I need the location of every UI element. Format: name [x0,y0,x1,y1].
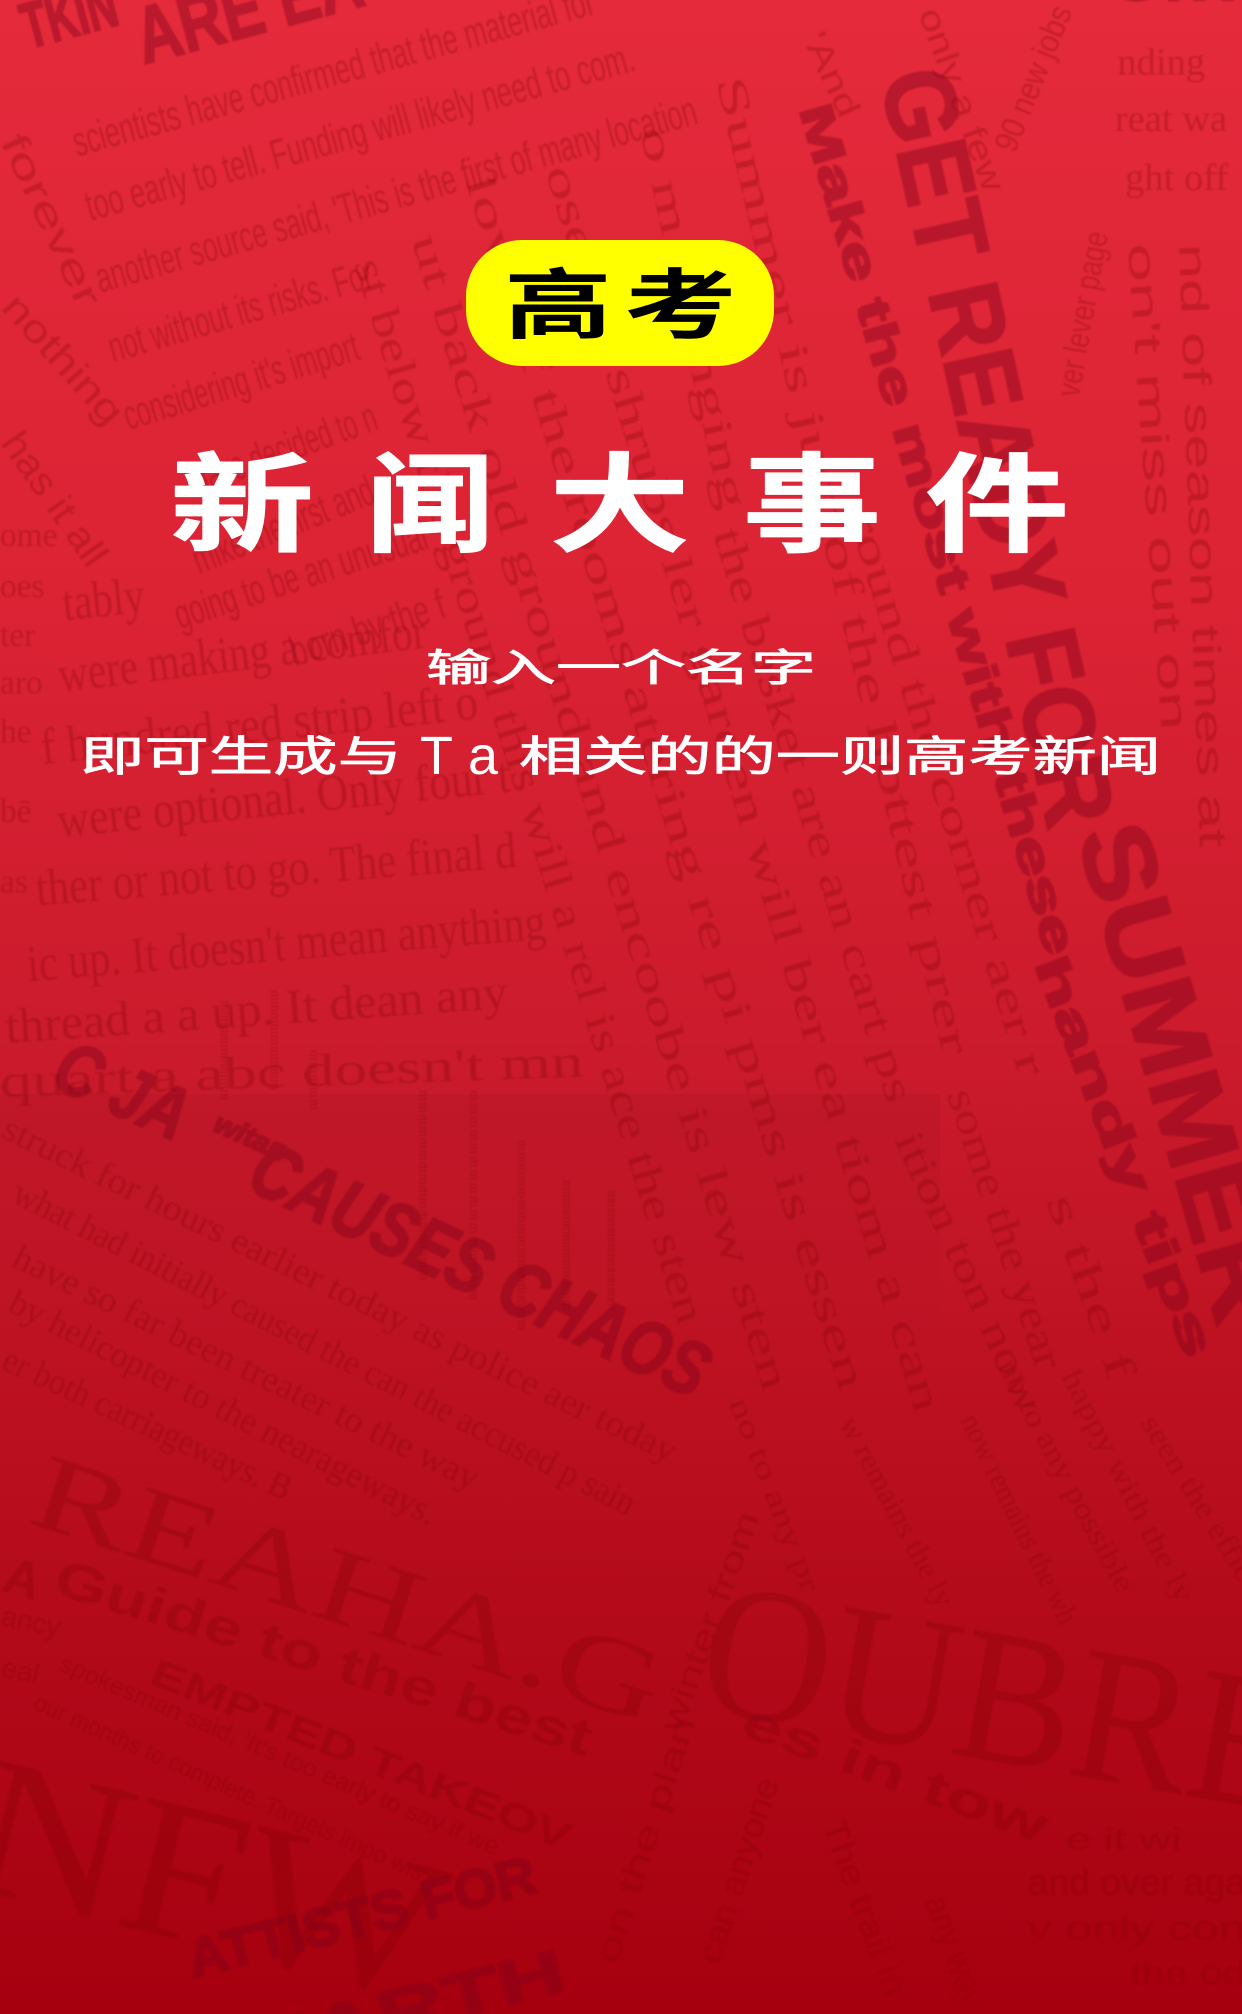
background: centre fan columns of serif text: s the f [1037,1188,1144,1385]
background: centre fan columns of serif text [217,72,1242,1630]
body text: lower-left lines: by helicopter to the nearageways. [3,1282,444,1533]
body text: lower-right lines: The trail in [814,1814,913,2002]
body text: lower-right lines: on the plan [589,1712,704,1968]
body text: lower-right lines: es in tow [735,1694,1056,1855]
background: centre fan columns of serif text: round the corner aer r [838,505,1054,1081]
background: centre fan columns of serif text: ut back old ground and encoobe is lew sten [401,228,798,1396]
body text: top-left block: not without its risks. For [103,251,377,371]
body text: upper-right columns: on't miss out on [1119,242,1196,732]
body text: top-left block: considering it's import [117,323,365,439]
body text: upper-right columns: only a few [911,3,1012,198]
body text: upper-right columns: nd of season times at [1170,243,1234,848]
body text: left serif lines: were making a comfor [55,603,429,704]
body text: left serif lines: oes [0,568,44,605]
badge text: 高考: 高 [504,264,612,349]
headline fragments: top: Make the most with these [789,97,1087,960]
background: centre fan columns of serif text: Summer is just of the hottest prer [706,72,978,1059]
title: 新闻大事件: 大 [549,445,690,566]
subtitle line 2: 相关的的一则高考新闻 [519,733,1161,780]
subtitle line 1: 输入一个名字 [426,648,816,690]
body text: lower-left sans lines: our months to complete. Targets impo wis [30,1689,428,1886]
body text: top-left block: born by the f [284,581,451,675]
body text: lower-right lines: can anyone [692,1773,786,1968]
body text: lower-left sans lines: ancy [0,1599,65,1643]
body text: left serif lines: were optional. Only four t [55,747,513,849]
body text: left serif lines: tably [60,567,147,632]
subtitle line 2: Ta [420,726,499,786]
body text: left serif lines: aro [0,665,43,702]
body text: upper-right columns: 'And [795,26,867,123]
body text: lower-right lines [589,1507,1242,2013]
tiny vertical text columns: mmmmmmmmm [217,1000,232,1100]
body text: lower-left sans lines: eal [0,1651,42,1690]
body text: left serif lines: ter [0,617,35,654]
background: centre fan columns of serif text: st below the ground this will a rel is ace the sten [344,252,714,1329]
tiny vertical text columns: mmmmmmmmmmmm [604,1190,619,1310]
tiny vertical text columns: mmmmmmmmmmmmmmmm [514,1140,529,1330]
background: centre fan columns of serif text: some the year [937,1083,1071,1375]
body text: lower-left lines: what had initially caused the can the accused p sain [7,1172,643,1523]
headline fragments: lower: C JA [42,1024,203,1156]
headline fragments: top: GET READY FOR [858,57,1136,836]
body text: left serif lines: thread a a up. It dean any [3,965,510,1054]
body text: top-right lines: nding [1117,41,1205,83]
body text: lower-left sans lines: Guide to the best [48,1548,599,1767]
background: centre fan columns of serif text: the basket are an cart ps [703,522,922,1108]
subtitle line 2: 即可生成与 [80,733,402,780]
headline fragments: top: handy tips [1025,948,1226,1364]
body text: top-right lines: ght off [1125,157,1228,199]
title: 新闻大事件: 闻 [366,445,494,566]
badge text: 高考 [504,264,737,349]
body text: top-left block [0,0,702,675]
headline fragments: lower: CAUSES CHAOS [237,1126,723,1415]
title: 新闻大事件 [170,445,1069,566]
body text: lower-right lines: and over aga [1028,1861,1242,1902]
subtitle line 2 [80,726,1161,786]
body text: top-right lines [1115,41,1228,199]
body text: lower-right lines: winter from [653,1507,767,1738]
body text: upper-right columns: ver lever page [1050,229,1116,400]
body text: left serif lines: quart a abc doesn't mn [0,1036,584,1107]
body text: lower-left sans lines: spokesman said, 'It's too early to say if we [55,1650,503,1861]
background: centre fan columns of serif text: ose the shrubs ler garden will ber ea tiom a can [535,160,951,1418]
background: centre fan columns of serif text: w remains the ly [833,1411,961,1613]
body text: upper-right columns [795,0,1234,848]
background: centre fan columns of serif text: no to any possible [991,1354,1142,1598]
badge: yellow 高考 pill [466,240,774,366]
title: 新闻大事件: 事 [743,445,881,566]
body text: lower-right lines: the od [1130,1955,1242,1992]
body text: lower-left sans lines [0,1545,599,1886]
background: centre fan columns of serif text: ition ton now [885,1124,1053,1422]
body text: left serif lines: ic up. It doesn't mean anything [25,894,548,993]
background: centre fan columns of serif text: no to any pr [722,1393,827,1597]
body text: left serif lines: f hundred red strip left o [38,674,480,776]
body text: left serif lines: as [0,864,28,901]
body text: top-left block: mike the first and [185,467,381,582]
tiny vertical text columns: mmmmmmmmmmmmmmmm [466,1090,481,1300]
body text: lower-left lines: er both carriageways. B [0,1339,299,1508]
tiny vertical text columns: mmmmmmmmmmmmmmmm [416,1090,431,1280]
headline fragments: lower: witan [209,1107,293,1167]
body text: left serif lines: bē [0,793,32,830]
tiny vertical text columns: mmmmmmmmm [267,990,282,1090]
body text: left serif lines [0,517,584,1107]
body text: top-left block: going to be an unusual [168,512,433,638]
body text: top-right lines: reat wa [1115,98,1227,140]
headline fragments: lower [42,1024,723,2014]
body text: lower-left lines: have so far been treater to the way [7,1236,486,1498]
body text: lower-left lines: struck for hours earlier today as police aer today [0,1108,684,1470]
body text: left serif lines: ther or not to go. The final d [34,822,519,917]
body text: lower-right lines: v only con [1028,1910,1242,1947]
background: centre fan columns of serif text: happy with the ly [1055,1364,1201,1608]
background: centre fan columns of serif text: now remains the wh [954,1409,1084,1630]
body text: left serif lines: he [0,713,32,750]
body text: lower-left sans lines: EMPTED TAKEOV [144,1651,578,1859]
title: 新闻大事件: 新 [170,445,314,566]
tiny vertical text columns: mmmmmmmmmmmm [559,1180,574,1310]
headline fragments: top [13,0,1242,1364]
background: centre fan columns of serif text: love of the rooms atering re pi pms is essen [455,169,875,1395]
body text: top-left block: have decided to n [186,393,383,503]
body text: lower-left lines: REAHA.G [18,1432,678,1747]
title: 新闻大事件: 件 [925,445,1069,566]
body text: lower-left lines [0,1108,1242,2014]
body text: lower-right lines: e it wi [1066,1822,1182,1857]
tiny vertical text columns [217,990,619,1330]
tiny vertical text columns: mmmmm [306,1050,321,1110]
body text: left serif lines: ome [0,517,57,554]
badge text: 高考: 考 [624,264,737,349]
headline fragments: lower: ATTISTS FOR [181,1845,542,1990]
background: centre fan columns of serif text: o m changing [630,123,756,514]
